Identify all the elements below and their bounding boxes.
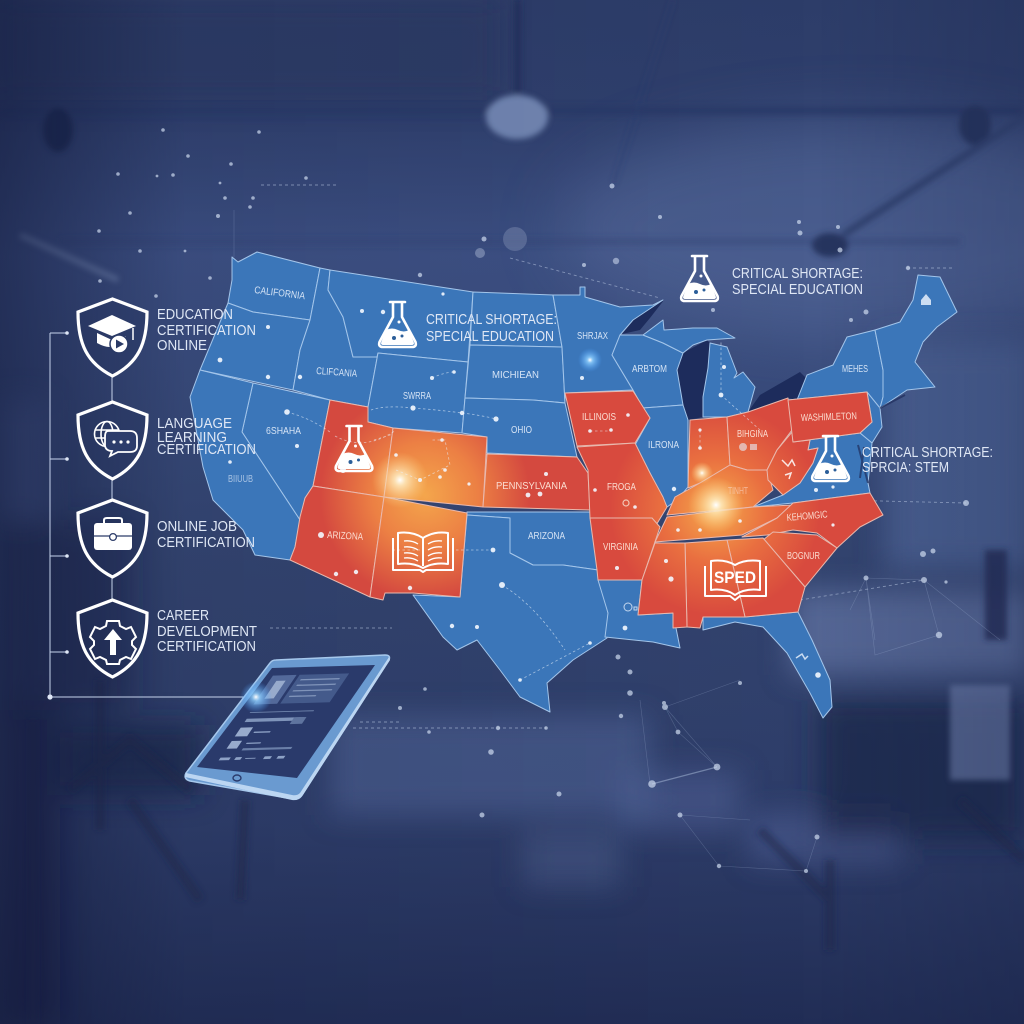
background network of dots and lines xyxy=(97,128,1000,873)
icon: flask utah xyxy=(336,426,372,471)
text: online job certification: CERTIFICATION xyxy=(157,534,255,551)
callout: critical shortage special education top right: SPECIAL EDUCATION xyxy=(732,281,863,298)
text: language learning certification xyxy=(157,415,256,458)
text: career development certification xyxy=(157,607,257,655)
text: career development certification: DEVELOPMENT xyxy=(157,623,257,640)
state labels: CALIFORNIA xyxy=(254,285,306,302)
state labels: ILLINOIS xyxy=(582,412,616,423)
text: language learning certification: LANGUAGE xyxy=(157,415,232,432)
text: career development certification: CAREER xyxy=(157,607,209,624)
icon: tablet xyxy=(185,655,390,800)
text: education certification online: ONLINE xyxy=(157,337,207,354)
shield: career development xyxy=(78,600,147,677)
state labels xyxy=(228,285,868,562)
state labels: ILRONA xyxy=(648,440,679,451)
callout: critical shortage stem: SPRCIA: STEM xyxy=(862,459,949,476)
text: education certification online: CERTIFICATION xyxy=(157,322,256,339)
state labels: ARIZONA xyxy=(327,530,364,543)
state labels: VIRGINIA xyxy=(603,542,638,553)
map dots xyxy=(218,292,835,682)
red states east xyxy=(565,391,883,628)
shield: education certification xyxy=(78,299,147,376)
state labels: ARIZONA xyxy=(528,531,565,542)
state labels: SWRRA xyxy=(403,391,431,402)
callout: critical shortage special education top right: CRITICAL SHORTAGE: xyxy=(732,265,863,282)
text: language learning certification: CERTIFICATION xyxy=(157,441,256,458)
state labels: OHIO xyxy=(511,425,532,436)
text: education certification online: EDUCATION xyxy=(157,306,233,323)
icon: SPED book xyxy=(705,560,766,600)
state labels: BIHGINA xyxy=(737,429,768,440)
text: language learning certification: LEARNING xyxy=(157,429,227,446)
state labels: SHRJAX xyxy=(577,331,608,342)
state labels: MEHES xyxy=(842,364,868,375)
shield: online job xyxy=(78,500,147,577)
map of United States xyxy=(190,252,957,718)
panel: certification list xyxy=(78,299,257,677)
text: career development certification: CERTIFICATION xyxy=(157,638,256,655)
state labels: TINHT xyxy=(728,486,748,497)
icon: SPED book: SPED xyxy=(714,568,756,587)
state labels: MICHIEAN xyxy=(492,370,539,381)
icon: open book xyxy=(393,533,453,572)
shield: language learning xyxy=(78,402,147,479)
state labels: ARBTOM xyxy=(632,364,667,375)
state labels: 6SHAHA xyxy=(266,426,301,437)
callout: critical shortage special education centre: SPECIAL EDUCATION xyxy=(426,328,554,345)
blue states xyxy=(190,252,957,718)
text: education certification online xyxy=(157,306,256,354)
state labels: KEHOMGIC xyxy=(786,509,828,524)
icon: flask montana xyxy=(379,302,416,347)
small map decorations xyxy=(623,294,931,659)
red states west xyxy=(290,400,590,600)
bracket connector xyxy=(47,331,250,700)
callout: critical shortage stem: CRITICAL SHORTAGE: xyxy=(862,444,993,461)
icon: flask virginia xyxy=(812,436,849,481)
callout: critical shortage special education top right xyxy=(732,265,863,298)
text: online job certification: ONLINE JOB xyxy=(157,518,237,535)
callout: critical shortage special education centre: CRITICAL SHORTAGE: xyxy=(426,311,557,328)
callout: critical shortage stem xyxy=(862,444,993,476)
state labels: PENNSYLVANIA xyxy=(496,481,567,492)
state labels: BIIUUB xyxy=(228,474,253,485)
text: online job certification xyxy=(157,518,255,551)
map dotted routes xyxy=(287,340,760,680)
map lights xyxy=(372,348,744,533)
state labels: WASHIMLETON xyxy=(801,411,857,424)
state labels: BOGNUR xyxy=(787,551,820,562)
lakes xyxy=(622,300,806,420)
icon: flask top right xyxy=(681,256,718,301)
callout: critical shortage special education centre xyxy=(426,311,557,345)
state labels: FROGA xyxy=(607,482,636,493)
state labels: CLIFCANIA xyxy=(316,366,358,380)
